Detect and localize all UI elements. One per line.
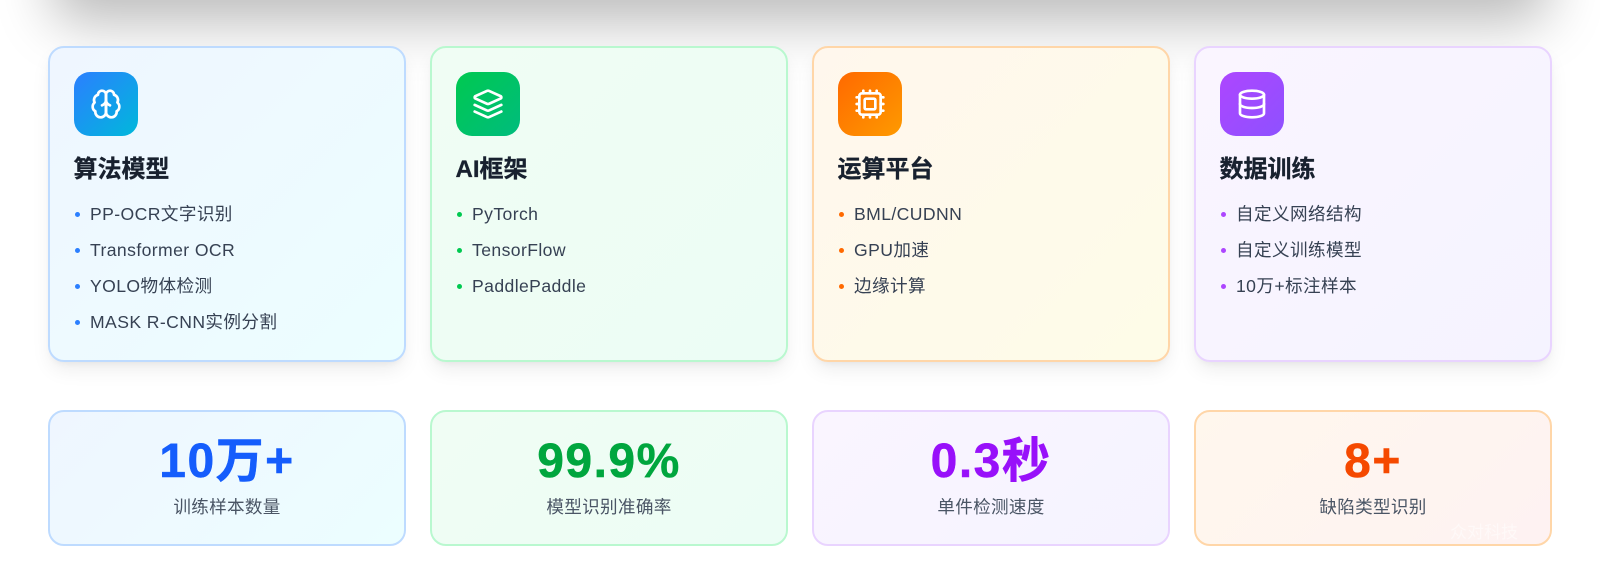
- panel: computing platform: [812, 46, 1170, 362]
- list: [457, 204, 586, 296]
- panel: algorithm models: [48, 46, 406, 362]
- stat: defect types: [1194, 410, 1552, 546]
- list: [839, 204, 962, 296]
- list: PaddlePaddle: [472, 276, 586, 296]
- number: 0.3秒: [931, 435, 1051, 488]
- number: 99.9%: [537, 435, 681, 488]
- label: 模型识别准确率: [546, 497, 672, 517]
- icon: layers: [456, 72, 520, 136]
- number: 10万+: [159, 435, 295, 488]
- stat: accuracy: [430, 410, 788, 546]
- panel: data training: [1194, 46, 1552, 362]
- icon: cpu: [838, 72, 902, 136]
- heading: AI框架: [456, 156, 528, 183]
- list: BML/CUDNN: [854, 204, 962, 224]
- list: [1221, 204, 1362, 296]
- watermark: 众对科技: [1450, 523, 1518, 542]
- list: 自定义网络结构: [1236, 204, 1362, 224]
- heading: 算法模型: [74, 156, 170, 183]
- list: GPU加速: [854, 240, 929, 260]
- heading: 运算平台: [838, 156, 934, 183]
- list: [75, 204, 277, 332]
- list: 自定义训练模型: [1236, 240, 1362, 260]
- label: 训练样本数量: [173, 497, 281, 517]
- heading: 数据训练: [1220, 156, 1316, 183]
- list: PP-OCR文字识别: [90, 204, 233, 224]
- list: YOLO物体检测: [90, 276, 212, 296]
- icon: database: [1220, 72, 1284, 136]
- number: 8+: [1344, 435, 1402, 488]
- panel: AI frameworks: [430, 46, 788, 362]
- icon: brain: [74, 72, 138, 136]
- stat: detection speed: [812, 410, 1170, 546]
- list: Transformer OCR: [90, 240, 235, 260]
- list: 边缘计算: [854, 276, 926, 296]
- list: 10万+标注样本: [1236, 276, 1357, 296]
- stat: training samples: [48, 410, 406, 546]
- label: 单件检测速度: [937, 497, 1045, 517]
- list: PyTorch: [472, 204, 538, 224]
- list: TensorFlow: [472, 240, 566, 260]
- list: MASK R-CNN实例分割: [90, 312, 277, 332]
- label: 缺陷类型识别: [1319, 497, 1427, 517]
